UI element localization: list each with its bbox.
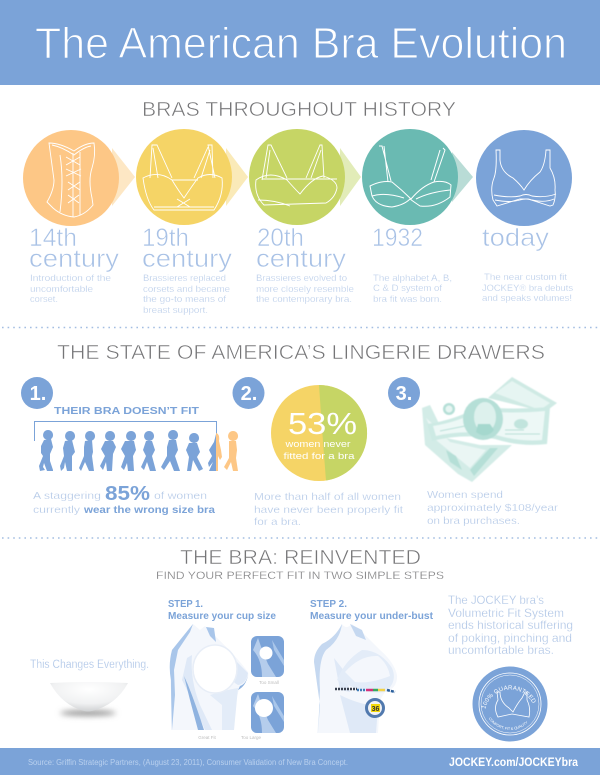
guarantee seal bbox=[472, 666, 548, 742]
icon: corset bbox=[47, 143, 95, 217]
stat text: of women bbox=[154, 490, 207, 502]
footer: Source: Griffin Strategic Partners, (August 23, 2011), Consumer Validation of New Bra Concept. bbox=[28, 758, 348, 767]
timeline: 1932: The alphabet A, B, bbox=[373, 273, 452, 284]
timeline: 1932: C & D system of bbox=[373, 283, 442, 294]
icon: brassiere bbox=[143, 145, 222, 210]
fit system text: of poking, pinching and bbox=[448, 631, 572, 645]
timeline: 14th century bbox=[23, 130, 135, 305]
timeline: 14th century: uncomfortable bbox=[30, 284, 93, 295]
timeline: 19th century bbox=[136, 129, 248, 316]
header banner bbox=[0, 0, 600, 85]
timeline: 19th century: Brassieres replaced bbox=[143, 273, 226, 284]
stat 3: spending bbox=[388, 377, 559, 527]
subheading: FIND YOUR PERFECT FIT IN TWO SIMPLE STEPS bbox=[156, 570, 444, 582]
orange figures bbox=[216, 431, 238, 471]
stat text: currently bbox=[33, 504, 81, 516]
step 1: cup size: STEP 1. bbox=[168, 598, 203, 610]
stat 1: wrong size: THEIR BRA DOESN’T FIT bbox=[54, 406, 199, 417]
product: bra cup: This Changes Everything. bbox=[30, 659, 149, 671]
timeline: today: today bbox=[482, 224, 550, 252]
timeline: 14th century: corset. bbox=[30, 294, 58, 305]
title: The American Bra Evolution bbox=[35, 19, 567, 68]
stat text: for a bra. bbox=[254, 516, 301, 528]
timeline: 20th century bbox=[249, 129, 361, 305]
number badge 1: 1. bbox=[30, 383, 46, 405]
footer: JOCKEY.com/JOCKEYbra bbox=[449, 755, 578, 769]
timeline: 14th century: century bbox=[29, 245, 120, 273]
timeline: 19th century: corsets and became bbox=[143, 284, 230, 295]
heading: reinvented: THE BRA: REINVENTED bbox=[180, 547, 421, 569]
stat text: 85% bbox=[105, 483, 150, 505]
timeline: 19th century: breast support. bbox=[143, 305, 208, 316]
stat text: More than half of all women bbox=[254, 491, 401, 503]
fit system text bbox=[448, 593, 573, 657]
number badge 1 bbox=[21, 377, 53, 409]
illustration: torso cup bbox=[170, 624, 248, 730]
badge: 36: 36 bbox=[372, 706, 379, 713]
stat 1: wrong size bbox=[21, 377, 238, 516]
stat text bbox=[427, 489, 559, 527]
label: great fit: Great Fit bbox=[198, 735, 216, 740]
timeline: 20th century: the contemporary bra. bbox=[256, 294, 352, 305]
icon: underwire bra bbox=[256, 145, 337, 206]
timeline: 1932: bra fit was born. bbox=[373, 294, 442, 305]
heading: bras throughout history: BRAS THROUGHOUT HISTORY bbox=[142, 98, 456, 121]
timeline: today: JOCKEY® bra debuts bbox=[482, 283, 573, 294]
icon: 1932 bra bbox=[370, 146, 451, 207]
guarantee seal: COMFORT, FIT & QUALITY bbox=[489, 718, 528, 730]
timeline: 1932 bbox=[362, 129, 473, 305]
timeline: 19th century: the go-to means of bbox=[143, 294, 226, 305]
step 2: under-bust bbox=[310, 598, 433, 733]
chart: 53% pie bbox=[271, 385, 367, 481]
fit system text: Volumetric Fit System bbox=[448, 606, 564, 620]
fit system text: The JOCKEY bra’s bbox=[448, 593, 544, 607]
chart: 53% pie: fitted for a bra bbox=[284, 451, 355, 462]
number badge 3 bbox=[388, 377, 420, 409]
timeline: 14th century: 14th bbox=[29, 224, 77, 252]
fit system text: uncomfortable bras. bbox=[448, 643, 554, 657]
timeline: today: The near custom fit bbox=[484, 272, 567, 283]
timeline: 19th century: 19th bbox=[142, 224, 189, 252]
label: too small: Too Small bbox=[259, 680, 279, 685]
timeline: 20th century: 20th bbox=[257, 224, 304, 252]
label: too large: Too Large bbox=[241, 735, 262, 740]
step 2: under-bust: STEP 2. bbox=[310, 598, 347, 610]
fit system text: ends historical suffering bbox=[448, 618, 573, 632]
timeline: 19th century: century bbox=[142, 245, 233, 273]
number badge 2 bbox=[232, 377, 264, 409]
chart: 53% pie: 53% bbox=[288, 406, 357, 441]
stat 2: never fitted bbox=[232, 377, 403, 528]
stat text bbox=[33, 483, 215, 516]
stat text: approximately $108/year bbox=[427, 502, 559, 514]
step 1: cup size bbox=[168, 598, 284, 740]
illustration: dollar bills bbox=[422, 377, 557, 482]
timeline: today bbox=[476, 130, 573, 304]
step 1: cup size: Measure your cup size bbox=[168, 610, 276, 622]
step 2: under-bust: Measure your under-bust bbox=[310, 610, 433, 622]
heading: lingerie drawers: THE STATE OF AMERICA’S LINGERIE DRAWERS bbox=[57, 342, 545, 364]
product: bra cup bbox=[30, 659, 149, 716]
stat text bbox=[254, 491, 403, 528]
timeline: 14th century: Introduction of the bbox=[30, 273, 111, 284]
footer bbox=[0, 748, 600, 775]
timeline: 20th century: more closely resemble bbox=[256, 284, 354, 295]
timeline: 1932: 1932 bbox=[372, 224, 423, 252]
timeline: today: and speaks volumes! bbox=[482, 293, 572, 304]
stat text: A staggering bbox=[33, 490, 101, 502]
guarantee seal: 100% GUARANTEED bbox=[482, 685, 536, 709]
stat text: Women spend bbox=[427, 489, 503, 501]
timeline: 20th century: century bbox=[256, 245, 347, 273]
chart: walking women bbox=[39, 430, 216, 471]
timeline: 20th century: Brassieres evolved to bbox=[256, 273, 347, 284]
stat text: wear the wrong size bra bbox=[83, 504, 215, 516]
stat text: on bra purchases. bbox=[427, 515, 520, 527]
icon: jockey bra bbox=[492, 150, 556, 206]
tile: too small bbox=[251, 636, 284, 677]
stat text: have never been properly fit bbox=[254, 504, 403, 516]
tile: too large bbox=[251, 692, 284, 733]
number badge 3: 3. bbox=[396, 383, 412, 405]
chart: 53% pie: women never bbox=[284, 439, 350, 450]
number badge 2: 2. bbox=[241, 383, 257, 405]
